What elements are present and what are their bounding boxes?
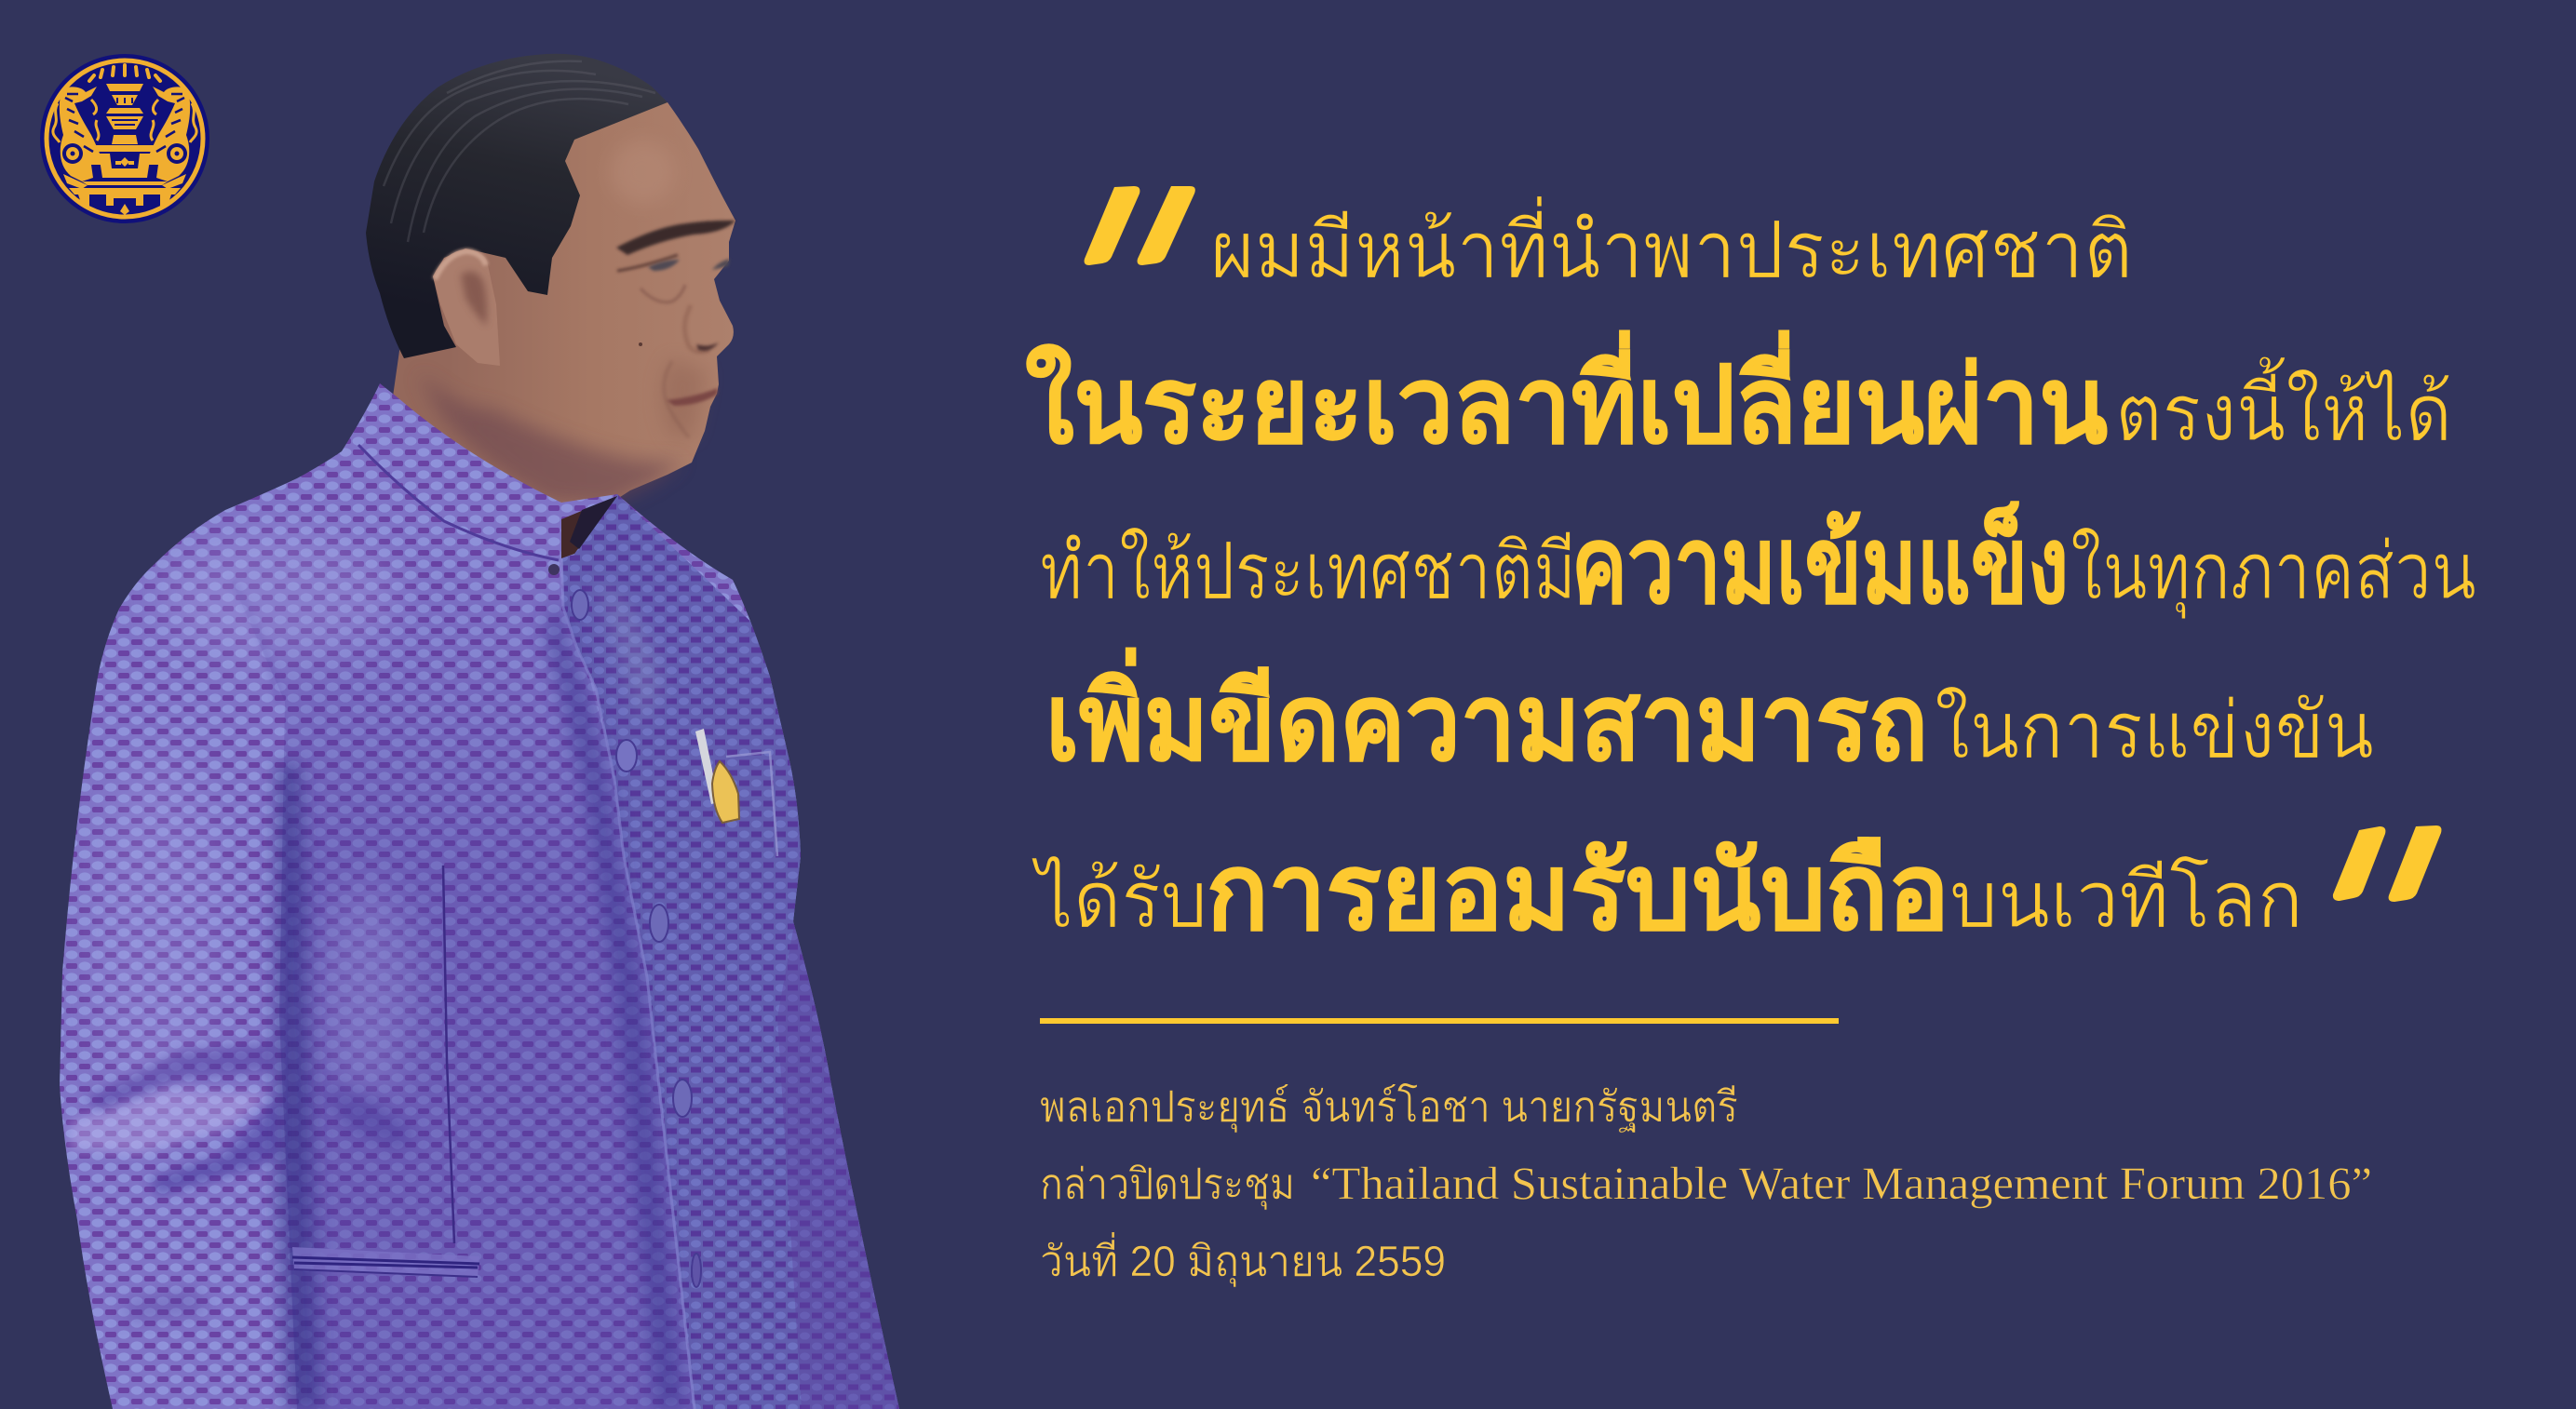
sleeve texture — [778, 929, 898, 1409]
jacket — [60, 383, 899, 1409]
event line Thai: กล่าวปิดประชุม — [1040, 1160, 1295, 1211]
nose wing — [684, 305, 709, 352]
closing quotation mark — [2333, 825, 2441, 902]
line 5 regular end: บนเวทีโลก — [1949, 856, 2303, 945]
button 2 — [650, 905, 668, 942]
eye bag — [641, 285, 685, 302]
gold pin — [712, 761, 739, 823]
opening quotation mark — [1085, 186, 1195, 265]
line 3 regular start: ทำให้ประเทศชาติมี — [1040, 528, 1576, 616]
inner ear — [461, 272, 487, 326]
outer sleeve behind — [777, 925, 899, 1409]
event line — [1040, 1157, 2372, 1211]
body shading — [258, 605, 695, 1409]
neck and face — [391, 102, 735, 535]
collar hook — [548, 564, 560, 575]
forearm fold — [121, 1289, 209, 1322]
cheek shadow — [661, 358, 708, 437]
line 1: ผมมีหน้าที่นำพาประเทศชาติ — [1210, 195, 2133, 295]
line 4 bold: เพิ่มขีดความสามารถ — [1045, 648, 1928, 783]
jaw and neck shadow — [419, 372, 684, 507]
shirt gap at collar — [561, 496, 617, 558]
speaker name: พลเอกประยุทธ์ จันทร์โอชา นายกรัฐมนตรี — [1040, 1082, 1738, 1134]
line 4 regular: ในการแข่งขัน — [1935, 687, 2374, 775]
sleeve seam shadow — [235, 584, 279, 691]
hair streaks — [384, 61, 655, 242]
date: วันที่ 20 มิถุนายน 2559 — [1040, 1231, 1446, 1288]
sleeve highlight — [93, 754, 223, 1107]
sleeve and body dark band — [276, 763, 321, 1409]
eye crease — [617, 255, 678, 271]
line 2 regular: ตรงนี้ให้ได้ — [2115, 356, 2452, 458]
ear — [433, 249, 500, 366]
event line English: “Thailand Sustainable Water Management Forum 2016” — [1311, 1157, 2372, 1209]
emblem: government seal — [40, 54, 209, 223]
shoulder highlight — [158, 530, 400, 661]
placket highlight — [598, 586, 663, 715]
dark upper gap — [570, 496, 617, 549]
button 4 — [692, 1254, 701, 1287]
eyebrow — [616, 221, 735, 255]
breast pocket — [726, 752, 777, 856]
body highlight — [321, 879, 414, 1102]
mouth — [667, 388, 718, 406]
collar seam — [358, 445, 559, 560]
pen clip — [695, 729, 719, 804]
placket light edge — [561, 554, 695, 1409]
elbow highlight — [70, 1089, 270, 1154]
line 3 bold: ความเข้มแข็ง — [1571, 501, 2069, 625]
mole — [639, 342, 642, 346]
button 1 — [616, 740, 637, 772]
hair — [366, 54, 668, 358]
elbow fold upper — [87, 1042, 276, 1112]
ear rim — [435, 251, 486, 279]
forehead highlight — [610, 140, 675, 205]
placket — [561, 494, 810, 1409]
line 2 bold: ในระยะเวลาที่เปลี่ยนผ่าน — [1025, 330, 2108, 465]
elbow fold lower — [149, 1098, 279, 1196]
smile line — [664, 361, 689, 437]
eye — [648, 259, 730, 271]
line 3 regular end: ในทุกภาคส่วน — [2070, 528, 2476, 620]
seam line — [443, 866, 454, 1243]
nostril — [696, 342, 719, 351]
line 5 bold: การยอมรับนับถือ — [1207, 833, 1949, 952]
attribution text — [1040, 1082, 2372, 1288]
quote text — [1025, 195, 2476, 952]
body fold — [320, 1085, 415, 1149]
divider line — [1040, 1018, 1839, 1024]
placket shadow — [545, 596, 684, 1409]
welt pocket — [292, 1247, 479, 1277]
portrait: man in purple jacket — [0, 54, 931, 1409]
line 5 regular start: ได้รับ — [1031, 856, 1207, 945]
button 3 — [673, 1080, 692, 1117]
top button — [572, 590, 588, 620]
